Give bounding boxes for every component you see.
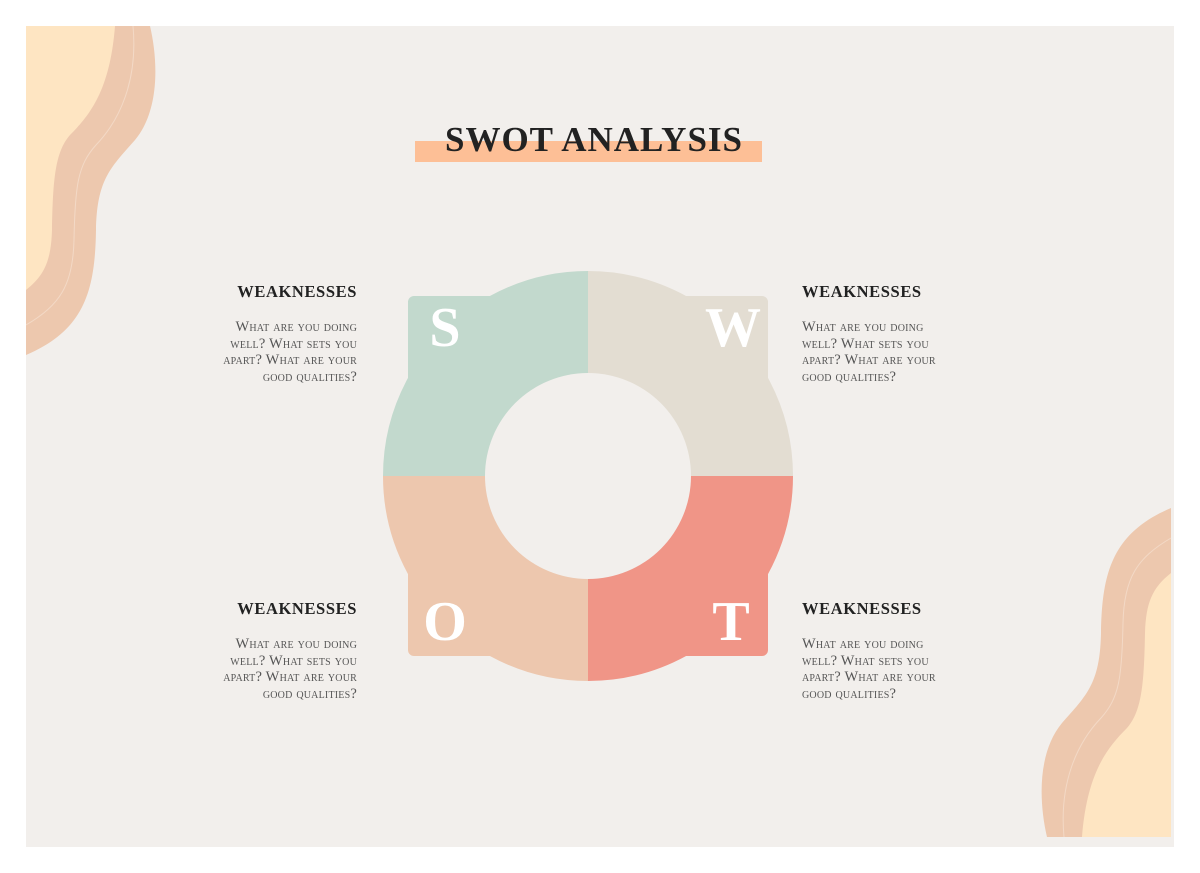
- text block: top-left: good qualities?: [263, 368, 357, 384]
- text block: bottom-right: apart? What are your: [802, 669, 936, 685]
- text block: top-right: well? What sets you: [802, 336, 929, 352]
- text block: top-right: apart? What are your: [802, 352, 936, 368]
- SWOT diagram: T: [712, 591, 750, 653]
- text block: top-left: What are you doing: [236, 319, 357, 335]
- center hole: [485, 373, 691, 579]
- text block: bottom-right: good qualities?: [802, 686, 896, 702]
- text block: bottom-left: good qualities?: [263, 686, 357, 702]
- text block: bottom-left: WEAKNESSES: [237, 599, 357, 618]
- text block: top-right: [802, 282, 936, 384]
- text block: bottom-left: apart? What are your: [223, 669, 357, 685]
- quadrant W: [588, 271, 793, 476]
- text block: top-right: What are you doing: [802, 319, 924, 335]
- text block: bottom-left: What are you doing: [236, 636, 357, 652]
- decoration: top-left wave: [26, 26, 155, 355]
- text block: top-left: well? What sets you: [230, 336, 357, 352]
- text block: bottom-left: [223, 599, 357, 702]
- text block: top-right: WEAKNESSES: [802, 282, 922, 301]
- text block: top-right: good qualities?: [802, 368, 896, 384]
- text block: top-left: WEAKNESSES: [237, 282, 357, 301]
- SWOT diagram: O: [423, 591, 467, 653]
- decoration: bottom-right wave: [1042, 508, 1171, 837]
- text block: top-left: [223, 282, 357, 384]
- text block: bottom-left: well? What sets you: [230, 652, 357, 668]
- text block: bottom-right: WEAKNESSES: [802, 599, 922, 618]
- text block: bottom-right: [802, 599, 936, 702]
- quadrant O: [383, 476, 588, 681]
- text block: bottom-right: What are you doing: [802, 636, 924, 652]
- SWOT diagram: W: [705, 297, 761, 359]
- text block: top-left: apart? What are your: [223, 352, 357, 368]
- letters: S: [429, 297, 461, 359]
- quadrant T: [588, 476, 793, 681]
- quadrant S: [383, 271, 588, 476]
- text block: bottom-right: well? What sets you: [802, 652, 929, 668]
- title: SWOT ANALYSIS: [445, 120, 743, 159]
- SWOT diagram: [383, 271, 793, 681]
